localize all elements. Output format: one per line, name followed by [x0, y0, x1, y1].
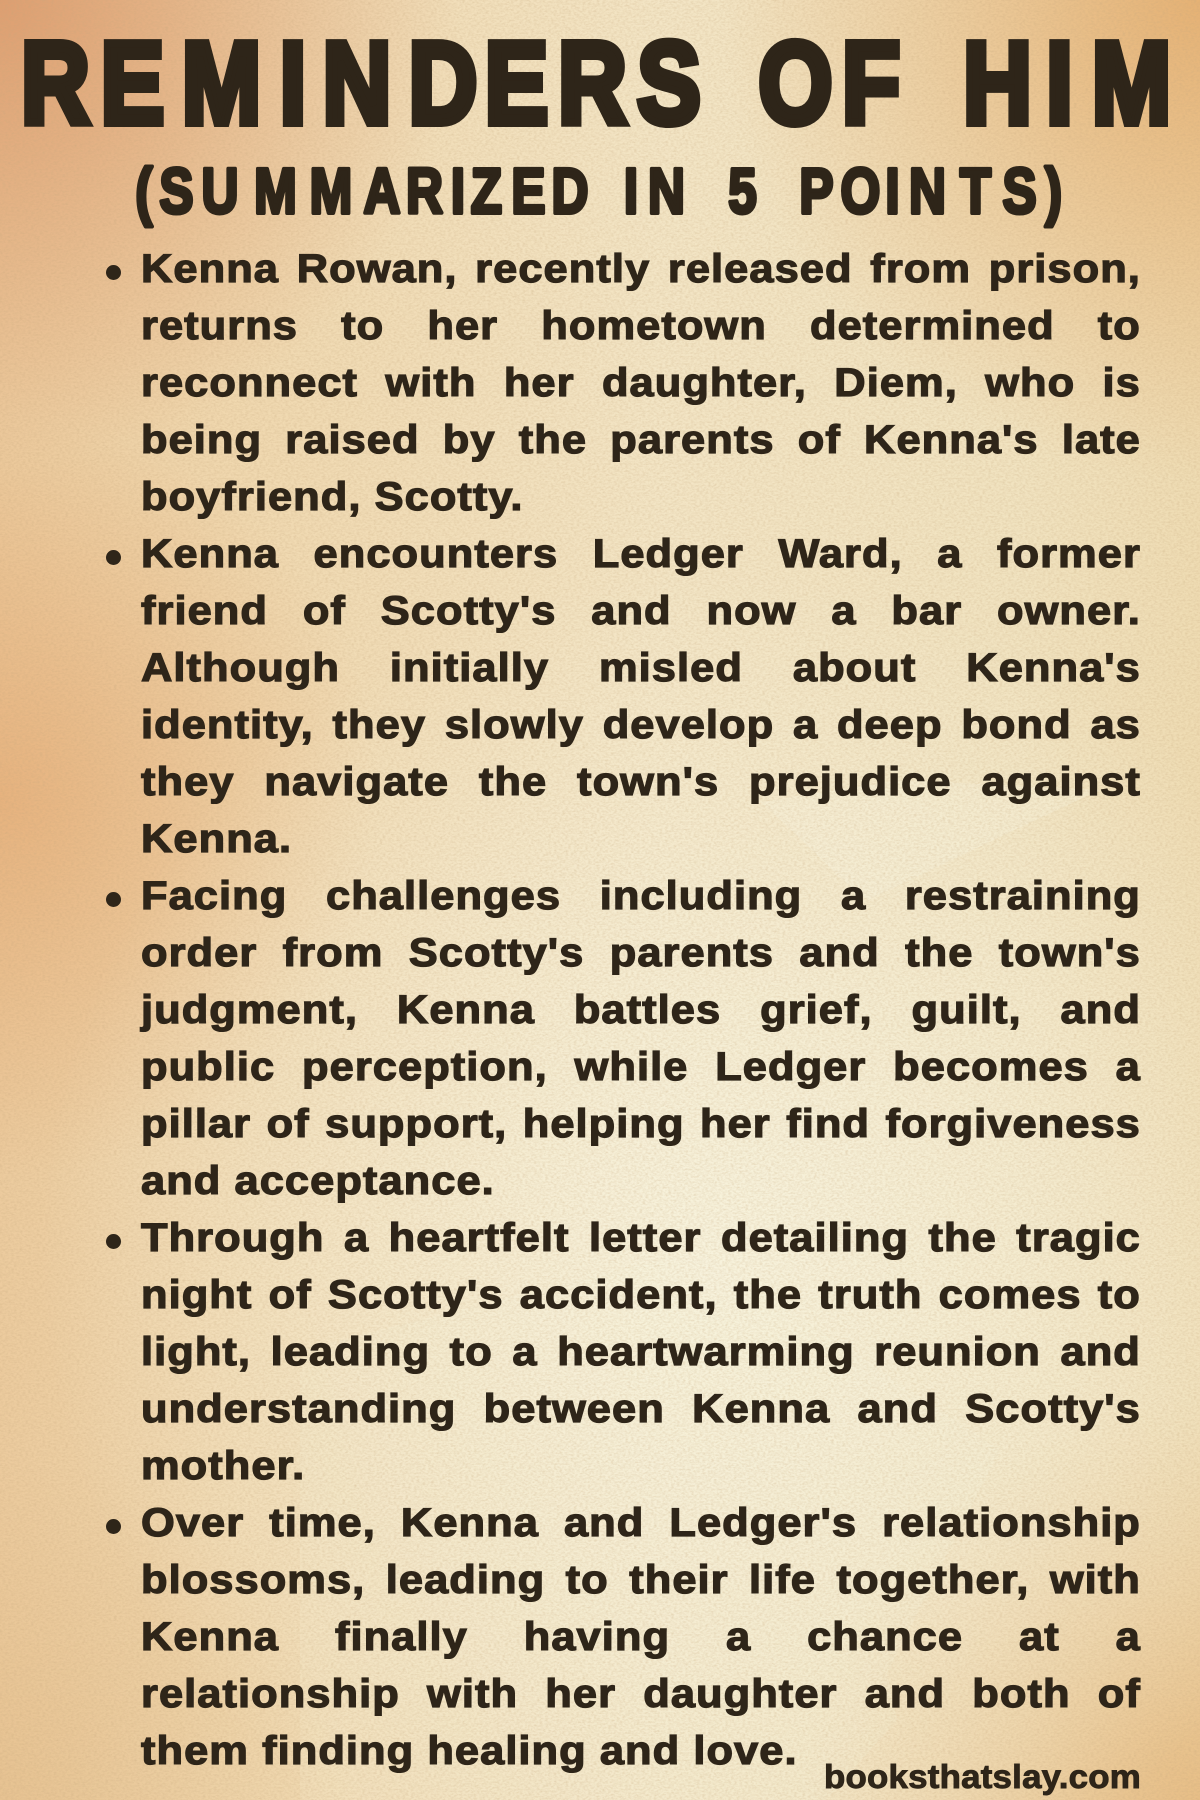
bullet 2: Kenna meets Ledger: Kenna encounters Ledger Ward, a former [141, 532, 1141, 576]
bullet 4: heartfelt letter: understanding between Kenna and Scotty's [141, 1387, 1141, 1431]
bullet 4: heartfelt letter: night of Scotty's accident, the truth comes to [141, 1273, 1141, 1317]
bullet 4: heartfelt letter: mother. [141, 1444, 305, 1488]
bullet 5: life together: blossoms, leading to their life together, with [141, 1558, 1141, 1602]
bullet 5: life together: relationship with her daughter and both of [141, 1672, 1141, 1716]
bullet 4: heartfelt letter [106, 1216, 1141, 1488]
bullet 1: Kenna returns: reconnect with her daughter, Diem, who is [141, 361, 1141, 405]
bullet 3: challenges: Facing challenges including a restraining [141, 874, 1141, 918]
bullet 2: Kenna meets Ledger: friend of Scotty's and now a bar owner. [141, 589, 1141, 633]
bullet 3: challenges: order from Scotty's parents and the town's [141, 931, 1141, 975]
bullet 1: Kenna returns: returns to her hometown determined to [141, 304, 1141, 348]
bullet 3: challenges: public perception, while Ledger becomes a [141, 1045, 1141, 1089]
bullet 2: Kenna meets Ledger: identity, they slowly develop a deep bond as [141, 703, 1141, 747]
bullet 3: challenges: and acceptance. [141, 1159, 495, 1203]
bullet 3: challenges [106, 874, 1141, 1203]
bullet 1: Kenna returns: being raised by the parents of Kenna's late [141, 418, 1141, 462]
bullet 2: Kenna meets Ledger [106, 532, 1141, 861]
bullet 1: Kenna returns: Kenna Rowan, recently released from prison, [141, 247, 1141, 291]
bullet 1: Kenna returns: boyfriend, Scotty. [141, 475, 524, 519]
bullet 5: life together: Kenna finally having a chance at a [141, 1615, 1141, 1659]
bullet 2: Kenna meets Ledger: they navigate the town's prejudice against [141, 760, 1141, 804]
footer: website: booksthatslay.com [824, 1758, 1141, 1795]
bullet 2: Kenna meets Ledger: Kenna. [141, 817, 292, 861]
bullet 3: challenges: pillar of support, helping her find forgiveness [141, 1102, 1141, 1146]
bullet 4: heartfelt letter: light, leading to a heartwarming reunion and [141, 1330, 1141, 1374]
bullet 3: challenges: judgment, Kenna battles grief, guilt, and [141, 988, 1141, 1032]
bullet 2: Kenna meets Ledger: Although initially misled about Kenna's [141, 646, 1141, 690]
bullet 1: Kenna returns [106, 247, 1141, 519]
bullet 5: life together: them finding healing and love. [141, 1729, 798, 1773]
bullet 5: life together: Over time, Kenna and Ledger's relationship [141, 1501, 1141, 1545]
bullet 4: heartfelt letter: Through a heartfelt letter detailing the tragic [141, 1216, 1141, 1260]
subtitle: (SUMMARIZED IN 5 POINTS) [135, 157, 1062, 227]
bullet 5: life together [106, 1501, 1141, 1773]
